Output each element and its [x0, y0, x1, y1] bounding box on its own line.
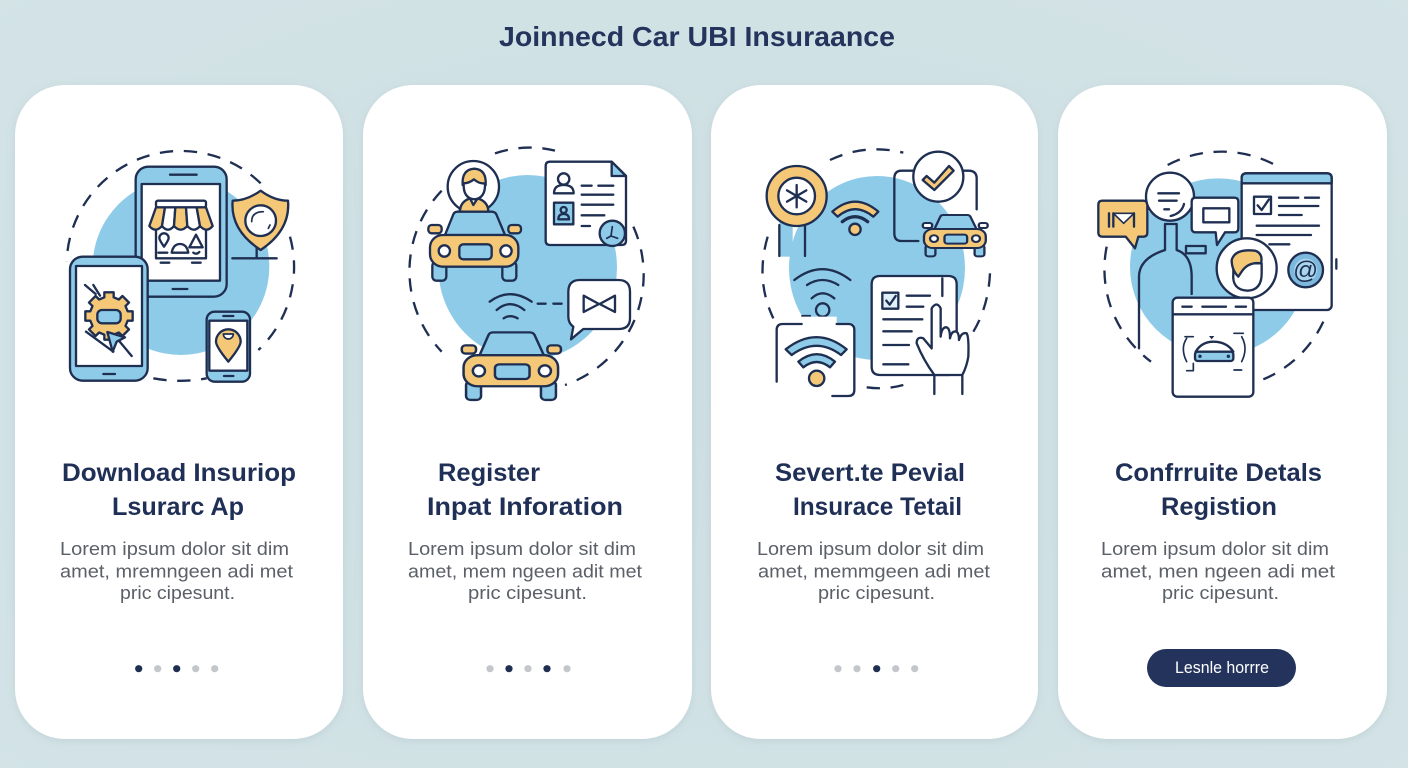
body text — [757, 538, 990, 603]
icon: pointing hand — [917, 304, 968, 394]
icon: message bubble — [568, 280, 630, 339]
icon: chat bubble — [1192, 198, 1238, 245]
body text: pric cipesunt. — [468, 582, 587, 603]
icon: checklist document — [872, 276, 957, 375]
icon: car card — [1173, 298, 1253, 397]
icon: shield on stand — [232, 191, 288, 258]
panel: confirm details — [1058, 85, 1387, 739]
heading — [1115, 459, 1322, 521]
body text: amet, men ngeen adi met — [1101, 560, 1335, 582]
heading: Download Insuriop — [62, 459, 296, 487]
card background — [363, 85, 692, 739]
card background — [711, 85, 1038, 739]
icon: profile document — [546, 162, 626, 246]
title: Joinnecd Car UBI Insuraance — [499, 21, 895, 52]
icon: phone with location pin — [207, 312, 250, 382]
icon: envelope bubble — [1098, 201, 1147, 248]
pagination dots — [834, 665, 918, 672]
illustration: devices with store, gear, shield and pin — [67, 151, 294, 382]
illustration: cars, profile and document — [409, 148, 644, 400]
illustration: messages, form, profile and car card — [1098, 152, 1336, 397]
heading: Confrruite Detals — [1115, 459, 1322, 487]
panel: download app — [15, 85, 343, 739]
icon: driver avatar — [448, 161, 499, 212]
icon: at sign badge — [1288, 253, 1323, 287]
body text: amet, mem ngeen adit met — [408, 560, 642, 582]
body text: pric cipesunt. — [1162, 582, 1279, 603]
heading: Insurace Tetail — [793, 493, 962, 521]
heading: Register — [438, 459, 540, 487]
icon: car top — [428, 212, 521, 281]
icon: verified card with car — [894, 152, 988, 256]
icon: wifi tile — [777, 317, 854, 396]
body text: pric cipesunt. — [818, 582, 935, 603]
body text: Lorem ipsum dolor sit dim — [1101, 538, 1329, 559]
card background — [15, 85, 343, 739]
icon: at sign badge: @ — [1293, 258, 1318, 285]
panel: register — [363, 85, 692, 739]
body text — [1101, 538, 1335, 603]
panel: select insurance — [711, 85, 1038, 739]
icon: bottle shape — [1139, 224, 1206, 348]
illustration: wifi, checklist, car and hand — [762, 149, 990, 396]
icon: top wifi — [832, 202, 878, 235]
icon: profile circle — [1217, 238, 1277, 298]
icon: round note — [1146, 173, 1194, 221]
heading: Inpat Inforation — [427, 493, 623, 521]
heading: Severt.te Pevial — [775, 459, 965, 487]
icon: phone with gear and cursor — [70, 257, 148, 381]
body text: pric cipesunt. — [120, 582, 235, 603]
body text: Lorem ipsum dolor sit dim — [757, 538, 984, 559]
icon: wifi signal and link — [490, 294, 562, 318]
body text: Lorem ipsum dolor sit dim — [60, 538, 289, 559]
body text: Lorem ipsum dolor sit dim — [408, 538, 636, 559]
pagination dots — [486, 665, 571, 672]
button — [1147, 649, 1296, 687]
card background — [1058, 85, 1387, 739]
icon: asterisk dial on posts — [767, 166, 827, 256]
heading: Registion — [1161, 493, 1277, 521]
heading — [62, 459, 296, 521]
icon: lower wifi on blue — [794, 269, 850, 317]
body text: amet, mremngeen adi met — [60, 560, 293, 582]
heading — [427, 459, 623, 521]
icon: car bottom — [462, 332, 561, 400]
heading: Lsurarc Ap — [112, 493, 244, 521]
icon: form document — [1242, 173, 1332, 310]
body text — [408, 538, 642, 603]
button: Lesnle horrre — [1175, 659, 1269, 677]
heading — [775, 459, 965, 521]
pagination dots — [135, 665, 218, 672]
icon: tablet with store — [136, 167, 227, 297]
body text: amet, memmgeen adi met — [758, 560, 990, 582]
body text — [60, 538, 293, 603]
